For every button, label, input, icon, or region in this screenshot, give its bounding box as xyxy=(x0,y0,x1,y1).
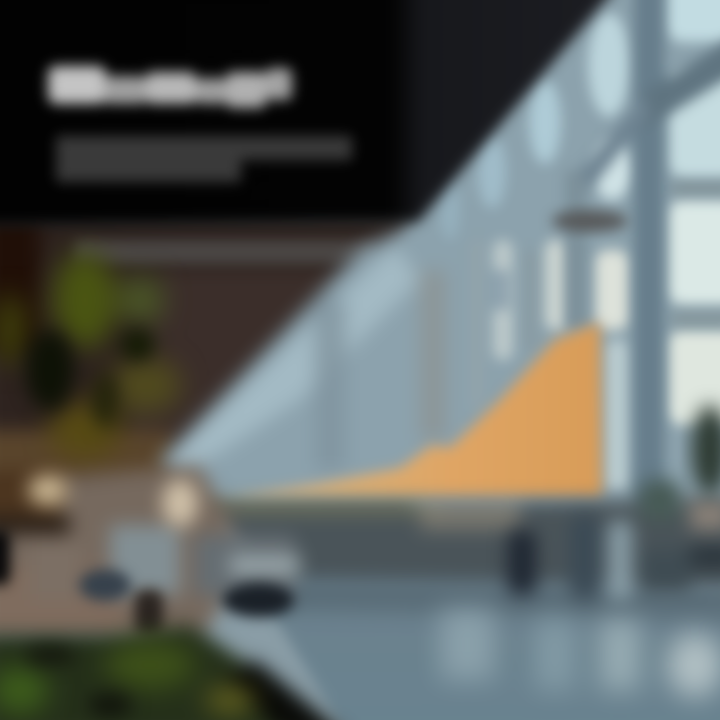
structural columns and beams xyxy=(565,0,720,510)
panel: glass facade with windows xyxy=(160,0,720,510)
description text block (unreadable blurred text) xyxy=(56,136,352,182)
panel: green planter foreground xyxy=(0,625,345,720)
chart: rising orange area xyxy=(225,322,602,497)
grey lamp xyxy=(552,210,628,232)
panel: bottom left lobby xyxy=(0,465,300,640)
panel: people silhouettes xyxy=(508,405,720,600)
panel: reflective floor xyxy=(240,575,720,720)
panel: dark brown wall and plant on the left xyxy=(0,215,410,515)
title (unreadable blurred text) xyxy=(48,66,292,108)
strip below the header xyxy=(75,240,375,264)
panel: lower lobby strip xyxy=(200,500,720,590)
warm ceiling lights xyxy=(28,474,198,527)
icon: plant foliage xyxy=(0,252,181,460)
dark chairs xyxy=(0,530,294,635)
window panes xyxy=(440,0,720,490)
panel: black header block xyxy=(0,0,622,226)
